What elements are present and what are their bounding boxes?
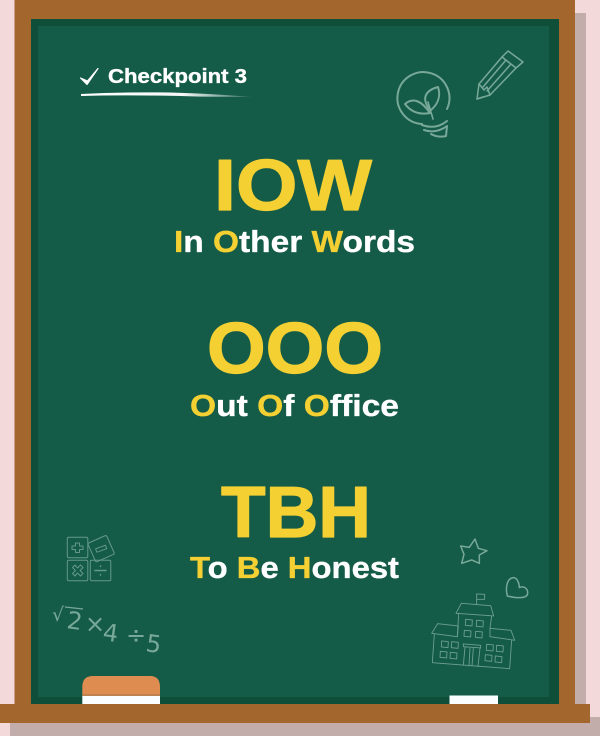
title: TBH: TBH: [221, 473, 371, 553]
heading text: Checkpoint 3: [108, 65, 247, 88]
heading: checkpoint: [80, 65, 252, 97]
icon: star: [461, 539, 487, 563]
frame ledge: [0, 704, 590, 723]
title: OOO: OOO: [207, 309, 383, 389]
icon: pencil: [477, 51, 523, 99]
eraser: [82, 676, 160, 704]
subtitle: In Other Words: In Other Words: [174, 225, 415, 259]
subtitle: Out Of Office: Out Of Office: [190, 389, 399, 423]
chalk stick: [450, 696, 498, 704]
chalk equation: √2×4÷5: [52, 604, 163, 659]
icon: light bulb: [397, 72, 449, 137]
subtitle: To Be Honest: To Be Honest: [190, 551, 399, 585]
chalk underline: [81, 92, 252, 97]
title: IOW: IOW: [214, 146, 372, 226]
icon: heart: [506, 578, 528, 598]
icon: math operators: [67, 535, 115, 581]
icon: check mark: [80, 68, 98, 84]
icon: school building: [432, 594, 515, 669]
